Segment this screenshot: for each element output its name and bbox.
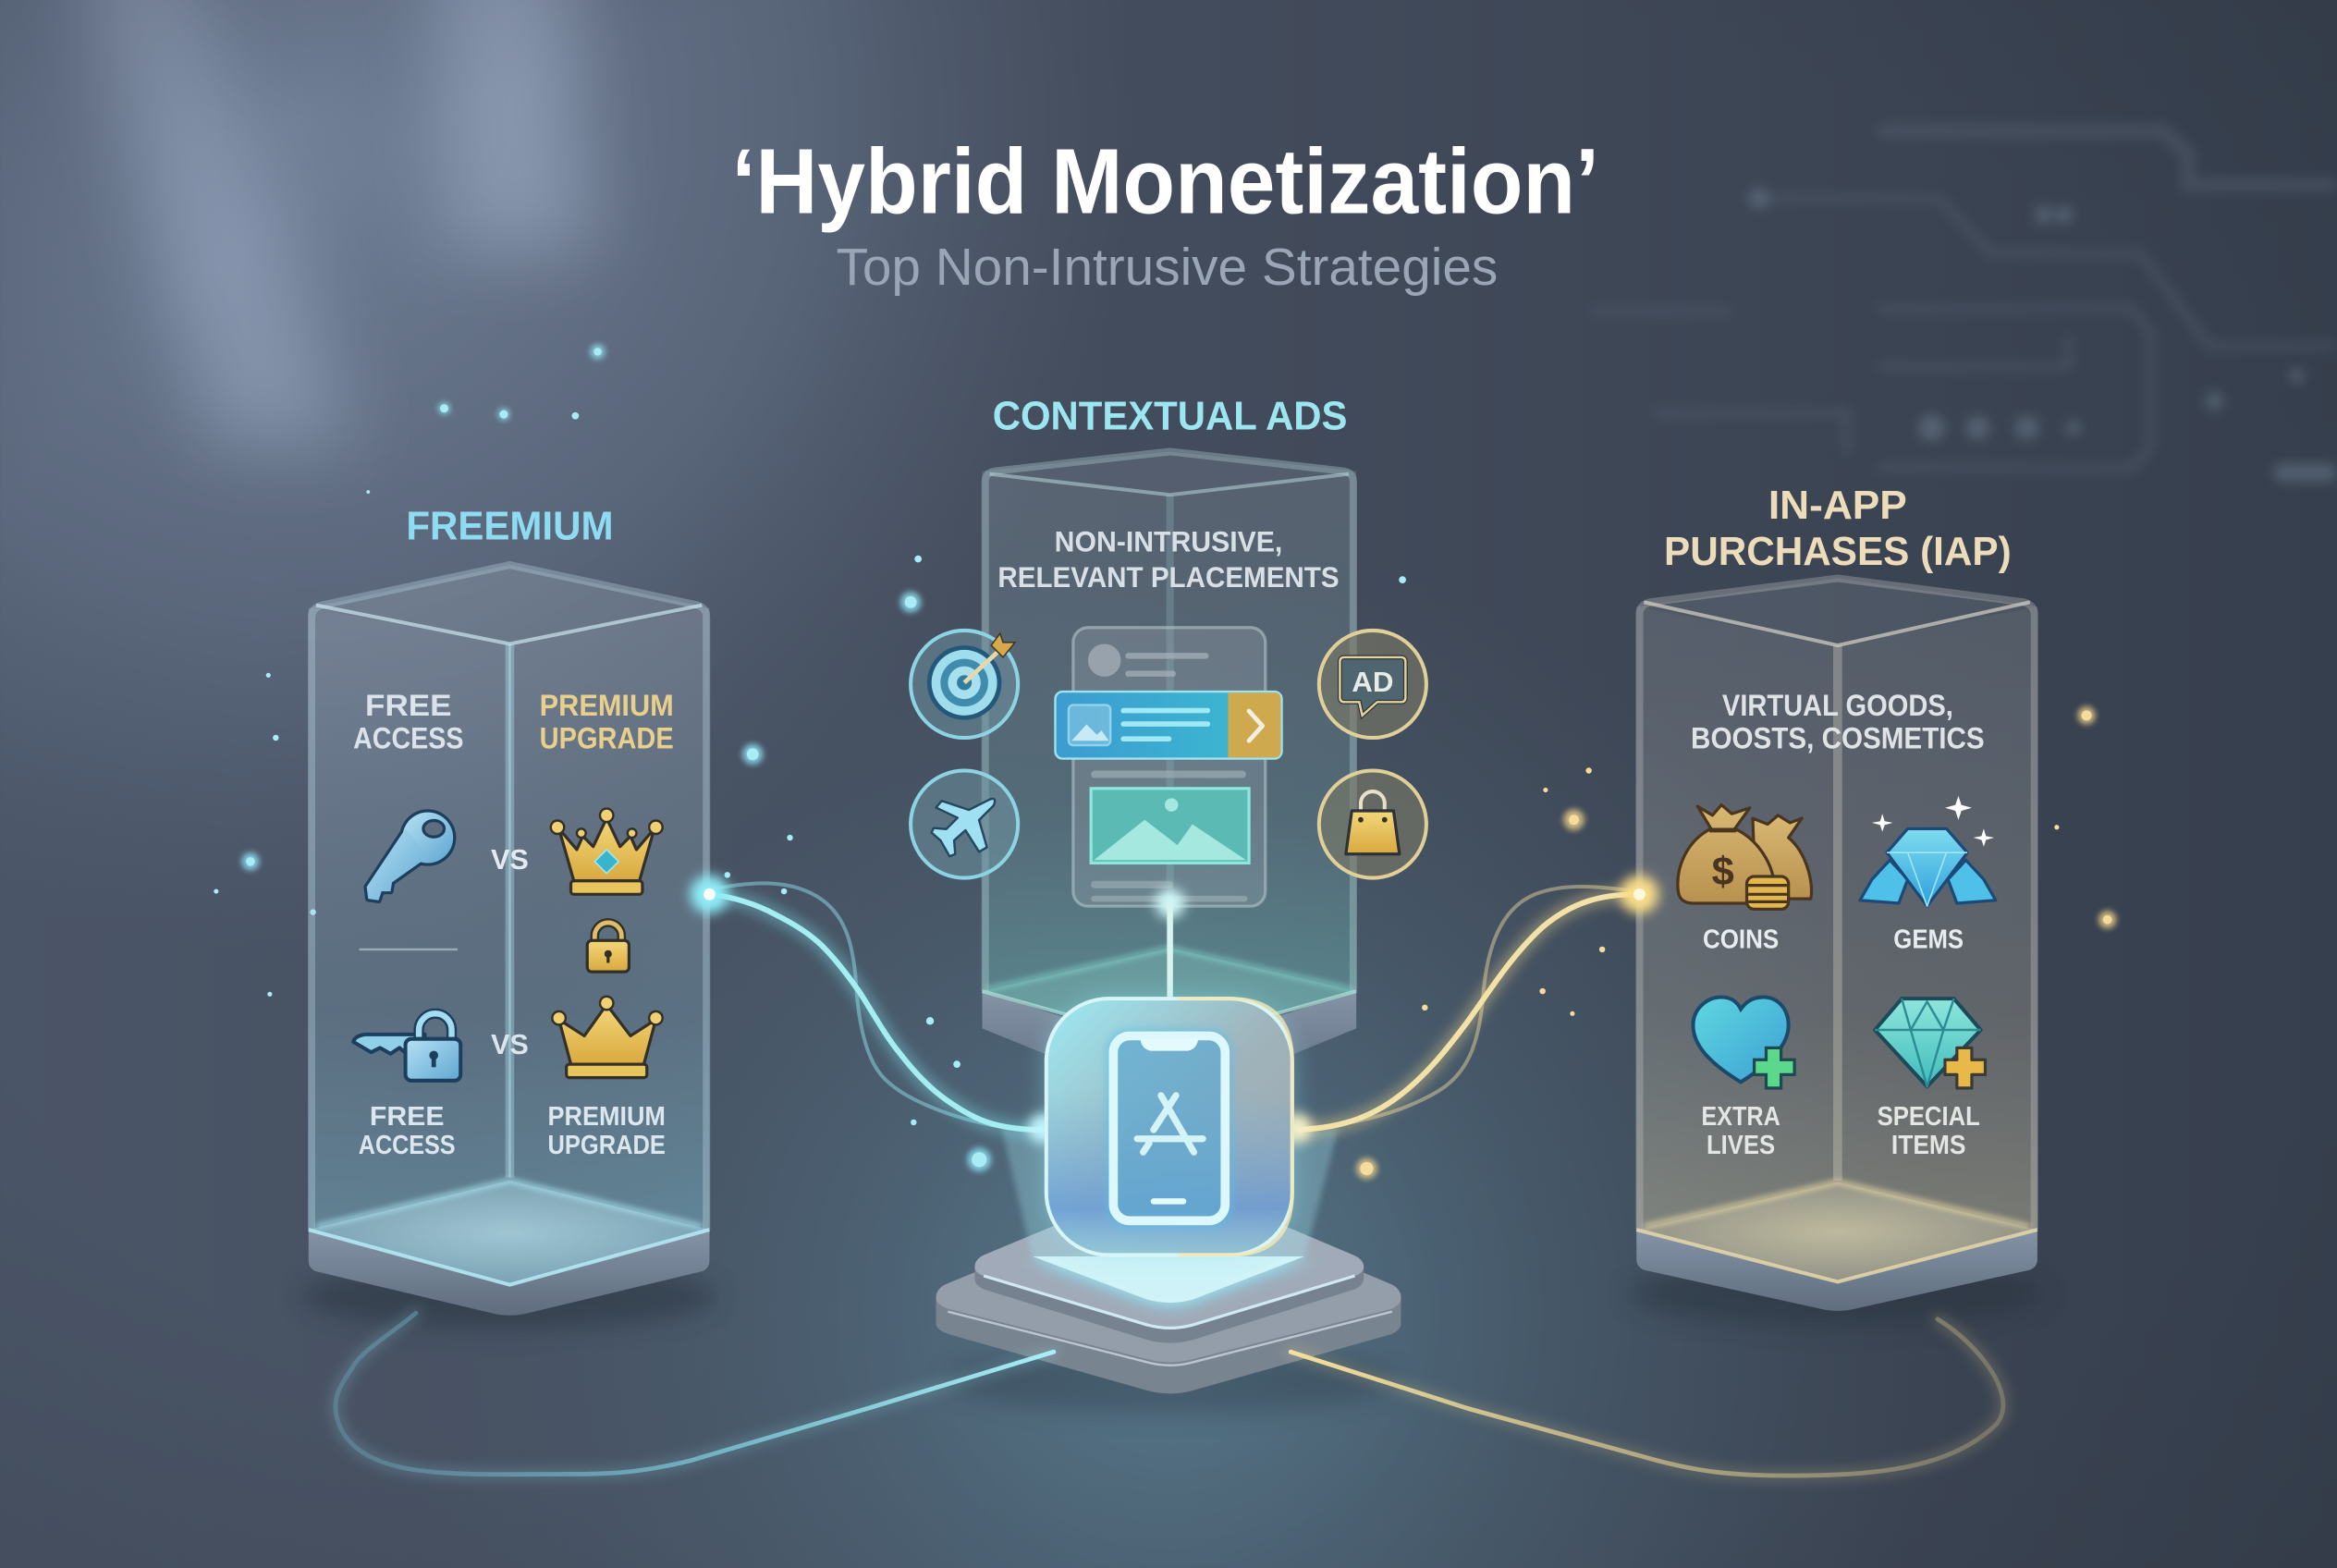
- connector: bottom cyan line: [336, 1313, 1054, 1475]
- text: iap description: VIRTUAL GOODS,: [1722, 689, 1953, 722]
- heading: in-app purchases: IN-APP: [1768, 484, 1907, 528]
- heading: in-app purchases: PURCHASES (IAP): [1664, 530, 2012, 574]
- icon: target: [911, 631, 1018, 738]
- connector: ads to app: [1155, 888, 1185, 998]
- text: iap description: BOOSTS, COSMETICS: [1691, 721, 1985, 754]
- text: premium upgrade bottom: UPGRADE: [548, 1131, 666, 1160]
- text: premium upgrade bottom: [548, 1102, 666, 1160]
- icon: shopping bag: [1319, 770, 1426, 878]
- connector: freemium to app: [690, 875, 1058, 1144]
- text: special items: [1878, 1102, 1980, 1160]
- text: contextual description: NON-INTRUSIVE,: [1055, 526, 1282, 558]
- text: premium upgrade top: PREMIUM: [540, 689, 674, 722]
- icon: gems: [1860, 796, 1996, 906]
- panel: contextual ads box: [911, 394, 1426, 1096]
- text: free access bottom: FREE: [370, 1102, 444, 1132]
- icon: diamond plus: [1875, 998, 1985, 1088]
- text: free access top: FREE: [365, 689, 452, 722]
- icon: heart plus: [1693, 998, 1794, 1088]
- text: special items: ITEMS: [1891, 1131, 1966, 1160]
- icon: app tile: [1046, 998, 1292, 1255]
- icon: coins money bags: [1678, 805, 1812, 909]
- text: extra lives: EXTRA: [1701, 1102, 1780, 1132]
- text: free access top: ACCESS: [353, 721, 463, 754]
- text: coins: COINS: [1703, 925, 1779, 954]
- text: free access top: [353, 689, 463, 754]
- icon: plane: [911, 770, 1018, 878]
- panel: in-app purchases box: [1629, 484, 2047, 1327]
- text: free access bottom: ACCESS: [359, 1131, 456, 1160]
- text: premium upgrade bottom: PREMIUM: [548, 1102, 666, 1132]
- icon: jeweled crown: [551, 809, 663, 894]
- particles: [214, 344, 2116, 1179]
- icon: key: [367, 813, 453, 900]
- text: vs bottom: VS: [491, 1029, 529, 1060]
- icon: phone outline: [1110, 1033, 1228, 1224]
- text: extra lives: LIVES: [1707, 1131, 1775, 1160]
- panel: freemium box: [301, 505, 718, 1329]
- icon: key with lock: [353, 1013, 460, 1081]
- icon: small lock: [587, 923, 629, 972]
- ad card: [1055, 692, 1282, 759]
- text: contextual description: RELEVANT PLACEMENTS: [997, 561, 1340, 594]
- icon: app store glyph: [1137, 1096, 1203, 1152]
- icon: ad bubble: [1319, 631, 1426, 738]
- heading: contextual ads: CONTEXTUAL ADS: [993, 394, 1347, 438]
- circuit pattern: [1593, 131, 2337, 482]
- heading: freemium: FREEMIUM: [406, 505, 613, 549]
- subtitle: Top Non-Intrusive Strategies: [836, 238, 1498, 296]
- connector: bottom gold line: [1291, 1319, 2003, 1476]
- connector: iap to app: [1282, 875, 1658, 1144]
- text: premium upgrade top: [540, 689, 674, 754]
- text: free access bottom: [359, 1102, 456, 1160]
- icon: plain crown: [552, 997, 663, 1078]
- icon: ad bubble: AD: [1352, 667, 1393, 698]
- heading: in-app purchases: [1664, 484, 2012, 574]
- text: iap description: [1691, 689, 1985, 754]
- text: contextual description: [997, 526, 1340, 594]
- icon: coins money bags: $: [1712, 851, 1734, 895]
- text: extra lives: [1701, 1102, 1780, 1160]
- text: premium upgrade top: UPGRADE: [540, 721, 674, 754]
- text: vs top: VS: [491, 844, 529, 876]
- text: special items: SPECIAL: [1878, 1102, 1980, 1132]
- title: ‘Hybrid Monetization’: [732, 131, 1599, 234]
- mobile feed mockup: [1073, 628, 1266, 906]
- platform: [936, 1128, 1401, 1415]
- text: gems: GEMS: [1893, 925, 1964, 954]
